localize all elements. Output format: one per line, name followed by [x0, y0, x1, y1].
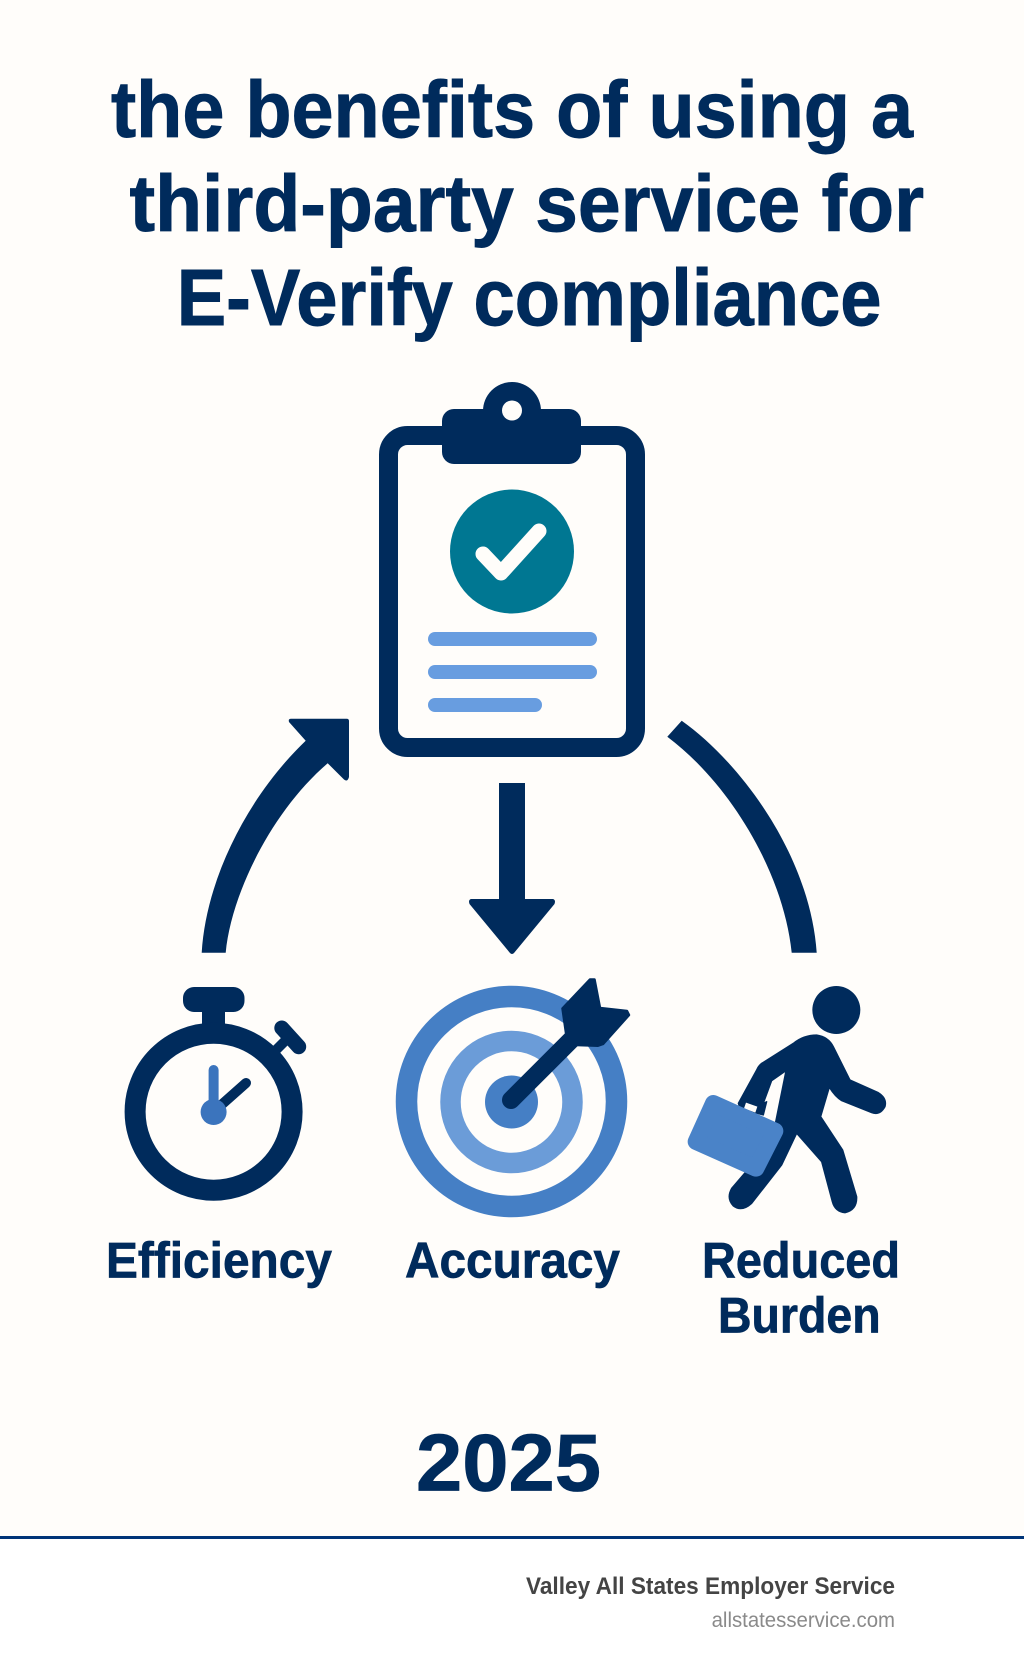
footer: website: allstatesservice.com	[712, 1609, 895, 1632]
icon: person walking with briefcase	[696, 986, 885, 1213]
title: E-Verify compliance	[177, 253, 881, 342]
label: accuracy: Accuracy	[405, 1233, 620, 1289]
icon: clipboard with checkmark	[388, 382, 636, 748]
icon: stopwatch	[135, 987, 299, 1190]
label: efficiency: Efficiency	[106, 1233, 332, 1289]
arrow: efficiency up to clipboard	[202, 719, 349, 953]
footer divider	[0, 1536, 1024, 1539]
title: third-party service for	[130, 159, 924, 248]
year: 2025	[416, 1418, 601, 1508]
footer: company name: Valley All States Employer Service	[526, 1573, 895, 1600]
arc: clipboard to reduced burden	[667, 721, 817, 953]
title: the benefits of using a	[111, 65, 913, 154]
icon: target with arrow	[406, 980, 629, 1206]
label: reduced burden	[702, 1233, 900, 1344]
label: reduced burden: Reduced	[702, 1233, 900, 1289]
arrow: clipboard down to accuracy	[469, 783, 555, 954]
title	[111, 65, 924, 342]
label: reduced burden: Burden	[718, 1288, 881, 1344]
